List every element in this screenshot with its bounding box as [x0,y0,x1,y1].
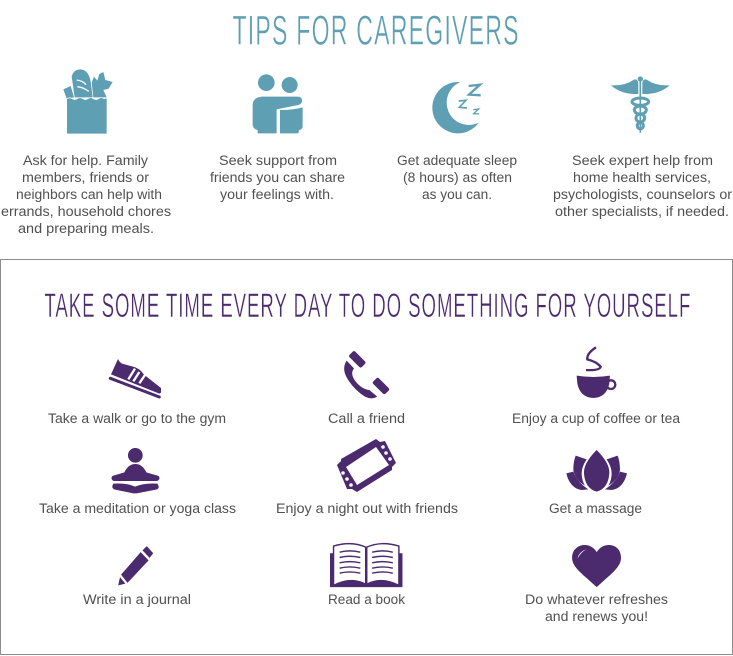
text: expert help [553,153,733,219]
icon: sneaker [110,359,161,397]
icon: two people hugging [253,74,303,133]
icon: coffee cup [577,347,615,398]
icon: phone handset [344,350,390,398]
text: seek support [210,153,345,202]
icon: moon and Z letters [432,80,491,133]
text: seek support: your feelings with. [220,187,334,202]
heading: TAKE SOME TIME EVERY DAY TO DO SOMETHING FOR YOURSELF [44,286,690,324]
text: expert help: home health services, [573,170,711,185]
panel: take time for yourself [0,260,732,654]
label: coffee or tea: Enjoy a cup of coffee or tea [512,411,681,426]
label: massage: Get a massage [549,501,642,516]
text: ask for help: and preparing meals. [18,221,154,236]
label: walk or gym: Take a walk or go to the gym [48,411,226,426]
label: meditation or yoga: Take a meditation or yoga class [39,501,236,516]
label: read a book: Read a book [328,592,405,607]
text: expert help: Seek expert help from [572,153,713,168]
text: ask for help: Ask for help. Family [23,153,148,168]
icon: grocery bag [63,69,113,134]
label: whatever refreshes: and renews you! [545,609,648,624]
text: adequate sleep: Get adequate sleep [397,153,517,168]
icon: caduceus [611,76,670,133]
icon: ticket [337,439,396,492]
text: seek support: Seek support from [219,153,337,168]
text: adequate sleep [397,153,517,202]
label: journal: Write in a journal [83,592,191,607]
text: ask for help [1,153,171,236]
label: whatever refreshes [525,592,668,624]
label: night out: Enjoy a night out with friends [276,501,458,516]
title: TIPS FOR CAREGIVERS [232,7,519,54]
icon: open book [330,544,402,587]
icon: heart [572,545,621,587]
text: expert help: psychologists, counselors or [553,187,733,202]
icon: pencil [118,546,153,585]
text: adequate sleep: (8 hours) as often [403,170,512,185]
label: whatever refreshes: Do whatever refreshes [525,592,668,607]
text: seek support: friends you can share [210,170,345,185]
text: ask for help: errands, household chores [1,204,171,219]
text: ask for help: members, friends or [22,170,150,185]
text: expert help: other specialists, if needed. [555,204,729,219]
icon: lotus [566,450,627,492]
text: adequate sleep: as you can. [422,187,492,202]
label: call a friend: Call a friend [328,411,405,426]
icon: meditating person [111,448,159,493]
text: ask for help: neighbors can help with [16,187,162,202]
